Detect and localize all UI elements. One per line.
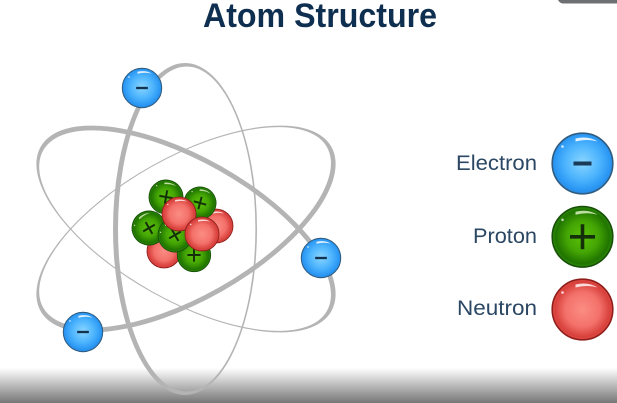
electron: top (122, 68, 162, 108)
legend icon: electron (552, 133, 613, 194)
atom diagram (5, 63, 367, 395)
proton: left (126, 205, 172, 251)
top-right corner tab (558, 0, 617, 4)
legend icon: neutron (552, 279, 613, 340)
electron: bottom left (63, 312, 103, 352)
legend label: electron: Electron (456, 152, 537, 175)
legend icon: proton (552, 206, 613, 267)
neutron: front right (185, 217, 219, 251)
legend label: neutron: Neutron (457, 297, 537, 320)
bottom shadow band (0, 368, 617, 403)
orbit: tilted ellipse, upper left to lower right (5, 84, 367, 374)
neutron: back right (199, 209, 233, 243)
proton: top left (146, 177, 186, 217)
proton: bottom (177, 238, 211, 272)
nucleus (126, 177, 233, 272)
proton: centre (152, 212, 198, 258)
neutron: front top (162, 197, 196, 231)
orbit: vertical ellipse (113, 63, 257, 395)
legend label: proton: Proton (473, 225, 537, 248)
neutron: back lower left (147, 234, 181, 268)
proton: top right (180, 183, 220, 223)
electron: right (301, 238, 341, 278)
legend (456, 133, 613, 340)
orbit: tilted ellipse, lower left to upper right (5, 84, 367, 374)
